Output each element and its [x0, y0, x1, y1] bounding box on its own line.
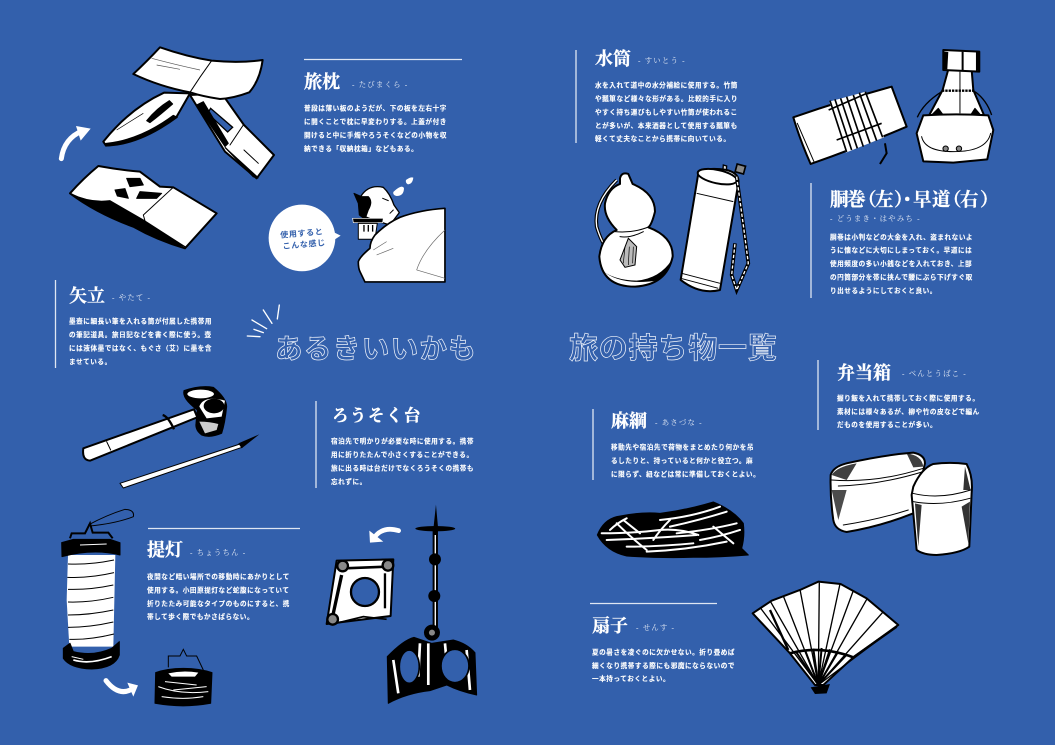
- body text: 軽くて丈夫なことから携帯に向いている。: [595, 134, 731, 143]
- body text: 胴巻は小判などの大金を入れ、盗まれないよ: [830, 232, 973, 242]
- body text: やすく持ち運びもしやすい竹筒が使われるこ: [595, 108, 738, 116]
- small box: [912, 463, 972, 555]
- section heading: aruki: あるきいいかも: [275, 333, 477, 364]
- body text: 夜間など暗い場所での移動時にあかりとして: [147, 572, 290, 581]
- body text: [331, 436, 474, 486]
- heading: 扇子: [592, 615, 628, 636]
- body text: [304, 104, 447, 153]
- body text: の円筒部分を帯に挟んで腰にぶら下げすぐ取: [830, 272, 973, 282]
- panel: candle stand text: [316, 401, 474, 488]
- heading: 矢立: [69, 286, 105, 306]
- body text: には液体墨ではなく、もぐさ（艾）に墨を含: [69, 344, 212, 352]
- body text: [595, 80, 738, 143]
- reading: - たびまくら -: [352, 80, 408, 89]
- heading: ろうそく台: [332, 405, 422, 425]
- body text: 墨壺に細長い筆を入れる筒が付属した携帯用: [69, 316, 212, 326]
- body text: 宿泊先で明かりが必要な時に使用する。携帯: [331, 436, 474, 446]
- panel: yatate text: [56, 280, 212, 368]
- heading: 弁当箱: [837, 363, 891, 383]
- section heading: list of travel items: 旅の持ち物一覧: [569, 332, 778, 365]
- bubble text: こんな感じ: [282, 237, 326, 251]
- body text: 旅に出る時は台だけでなくろうそくの携帯も: [331, 464, 474, 472]
- bubble text: 使用すると: [280, 226, 324, 240]
- heading: 提灯: [147, 539, 183, 560]
- body text: 夏の暑さを凌ぐのに欠かせない。折り畳めば: [592, 648, 735, 656]
- illustration: bento boxes: [831, 453, 972, 555]
- body text: [611, 442, 760, 478]
- reading: - べんとうばこ -: [902, 369, 967, 378]
- body text: [837, 394, 980, 429]
- open pillow right leg: [190, 93, 274, 178]
- panel: tabimakura text: [304, 60, 462, 153]
- heading: 旅枕: [304, 72, 340, 92]
- body text: 折りたたみ可能なタイプのものにすると、携: [147, 599, 290, 608]
- body text: [592, 648, 735, 683]
- illustration: lantern: [62, 509, 212, 706]
- body text: ませている。: [69, 358, 112, 366]
- arrow: [61, 126, 91, 159]
- illustration: folding fan: [753, 582, 898, 694]
- illustration: water flasks: [596, 50, 993, 291]
- person: [353, 177, 445, 282]
- body text: 使用する。小田原提灯など蛇腹になっていて: [147, 586, 290, 594]
- body text: 水を入れて道中の水分補給に使用する。竹筒: [595, 80, 738, 90]
- heading: 胴巻（左）・早道（右）: [830, 190, 999, 211]
- quick-draw pouch: [917, 50, 993, 163]
- illustration: pillow: [61, 47, 274, 248]
- large box: [831, 453, 925, 532]
- arrow: [106, 681, 138, 697]
- body text: うに懐などに大切にしまっておく。早道には: [830, 246, 972, 254]
- body text: り出せるようにしておくと良い。: [830, 286, 937, 295]
- body text: とが多いが、本来酒器として使用する瓢箪も: [595, 121, 738, 130]
- panel: sensu text: [590, 604, 735, 683]
- closed pillow: [70, 166, 217, 248]
- illustration: sleeping person with speech bubble: [269, 177, 445, 282]
- body text: 帯して歩く際でもかさばらない。: [147, 612, 254, 621]
- gourd: [596, 173, 673, 287]
- body text: の筆記道具。旅日記などを書く際に使う。壺: [69, 330, 212, 339]
- body text: [69, 316, 212, 366]
- body text: 用に折りたたんで小さくすることができる。: [331, 450, 474, 459]
- arrow: [369, 529, 399, 543]
- reading: - せんす -: [636, 623, 675, 632]
- reading: - やたて -: [112, 293, 151, 302]
- body text: 移動先や宿泊先で荷物をまとめたり何かを吊: [611, 442, 754, 452]
- body text: 忘れずに。: [331, 477, 367, 486]
- body text: 握り飯を入れて携帯しておく際に使用する。: [837, 394, 979, 402]
- body text: に開くことで枕に早変わりする。上蓋が付き: [304, 117, 447, 126]
- ink pot and tube: [83, 387, 227, 461]
- body text: [830, 232, 973, 295]
- bamboo flask: [681, 164, 748, 291]
- reading: - ちょうちん -: [190, 548, 246, 557]
- brush: [120, 434, 259, 488]
- open pillow top: [133, 47, 263, 99]
- burst lines: [247, 305, 279, 337]
- open lantern: [62, 509, 134, 669]
- heading: 水筒: [595, 49, 631, 69]
- illustration: candle stand: [327, 505, 477, 703]
- body text: 普段は薄い板のようだが、下の板を左右十字: [304, 104, 447, 112]
- body text: [147, 572, 290, 621]
- body text: に限らず、紐などは常に準備しておくとよい。: [611, 470, 760, 478]
- bubble text: [280, 226, 326, 251]
- open pillow left leg: [103, 93, 190, 146]
- body text: や瓢箪など様々な形がある。比較的手に入り: [595, 94, 738, 103]
- reading: - あさづな -: [655, 418, 703, 427]
- reading: - どうまき・はやみち -: [830, 214, 921, 223]
- reading: - すいとう -: [638, 56, 686, 65]
- illustration: yatate: [83, 387, 259, 488]
- folded plate: [327, 559, 393, 625]
- panel: bento text: [818, 360, 980, 430]
- belly wrap: [793, 87, 907, 164]
- body text: るしたりと、持っていると何かと役立つ。麻: [611, 456, 753, 465]
- body text: 一本持っておくとよい。: [592, 674, 670, 683]
- heading: 麻綱: [611, 410, 647, 431]
- body text: 使用頻度の多い小銭などを入れておき、上部: [830, 259, 972, 268]
- body text: 開けると中に手燭やろうそくなどの小物を収: [304, 130, 447, 140]
- panel: suito text: [576, 49, 738, 143]
- folded lantern: [155, 649, 212, 706]
- body text: だものを使用することが多い。: [837, 420, 937, 429]
- speech bubble: [269, 205, 341, 271]
- body text: 納できる「収納枕箱」などもある。: [304, 144, 418, 153]
- panel: asazuna text: [593, 409, 760, 480]
- panel: domaki and hayamichi text: [811, 183, 999, 298]
- illustration: hemp rope: [597, 502, 748, 558]
- panel: lantern text: [147, 528, 300, 621]
- candlestick: [387, 505, 477, 703]
- body text: 細くなり携帯する際にも邪魔にならないので: [592, 661, 735, 670]
- body text: 素材には様々あるが、柳や竹の皮などで編ん: [837, 407, 980, 416]
